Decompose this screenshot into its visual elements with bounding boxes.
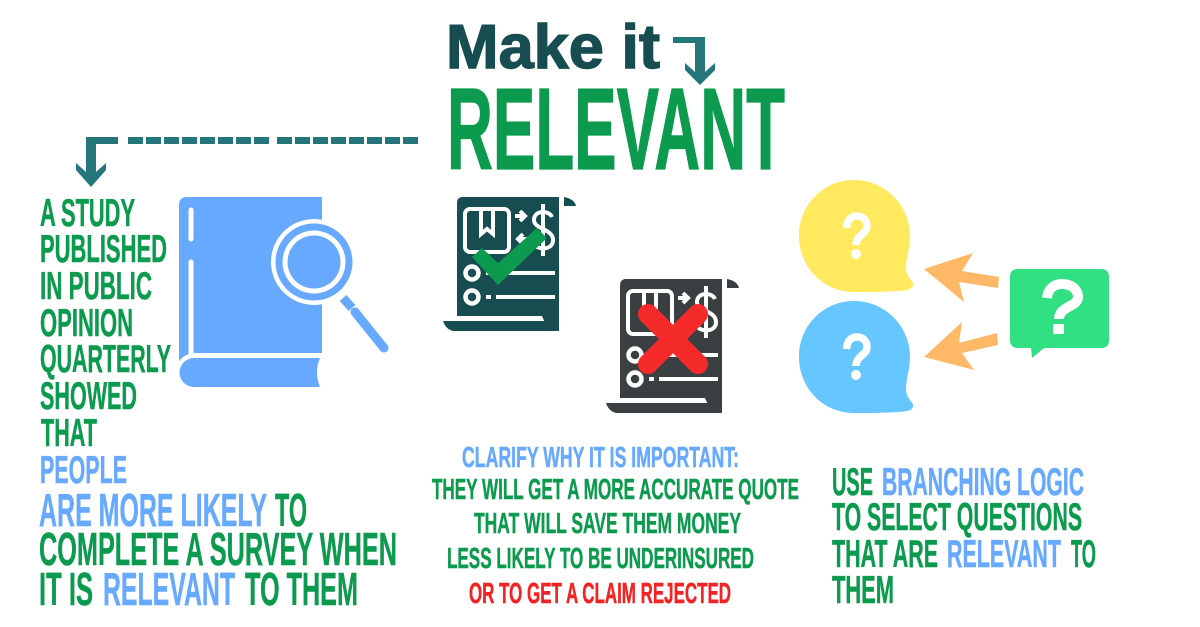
- title: Make it: [446, 13, 660, 82]
- icon: invoice with red cross: [606, 279, 739, 413]
- icon: blue question bubble: [799, 301, 913, 413]
- text block: study finding: RELEVANT: [103, 563, 235, 615]
- title: RELEVANT: [447, 64, 785, 194]
- text block: branching logic: [832, 461, 1096, 612]
- icon: green question bubble: [1010, 269, 1109, 358]
- text block: study intro: PUBLISHED: [40, 228, 167, 271]
- title: [446, 13, 785, 194]
- text block: study intro: SHOWED: [40, 375, 137, 418]
- text block: branching logic: THAT ARE: [832, 533, 938, 576]
- icon: book with magnifying glass: [179, 197, 384, 387]
- text block: study finding: TO THEM: [245, 563, 358, 615]
- text block: study finding: IT IS: [39, 563, 93, 615]
- arrow: green bubble to yellow bubble: [924, 253, 999, 302]
- text block: study finding: ARE MORE LIKELY: [39, 484, 267, 536]
- arrow: green bubble to blue bubble: [924, 322, 998, 370]
- text: TO: [1071, 533, 1096, 576]
- text block: study finding: COMPLETE A SURVEY WHEN: [39, 523, 397, 575]
- text block: study finding: [39, 484, 397, 615]
- text block: clarify why it is important: THAT WILL SAVE THEM MONEY: [474, 508, 741, 540]
- text block: study intro: IN PUBLIC: [40, 265, 152, 308]
- icon: invoice with green check: [443, 197, 576, 331]
- arrow: dashed line to left column: [76, 137, 421, 187]
- text block: study finding: TO: [275, 484, 307, 536]
- text block: branching logic: USE: [832, 461, 873, 504]
- text block: clarify why it is important: OR TO GET A CLAIM REJECTED: [469, 578, 731, 610]
- icon: yellow question bubble: [799, 180, 913, 292]
- text block: study intro: OPINION: [40, 302, 133, 345]
- text block: study intro: PEOPLE: [40, 449, 127, 492]
- text block: study intro: [40, 192, 171, 492]
- arrow: title down to heading: [673, 37, 715, 85]
- text block: branching logic: THEM: [832, 569, 894, 612]
- text block: clarify why it is important: THEY WILL GET A MORE ACCURATE QUOTE: [432, 474, 799, 506]
- text block: clarify why it is important: LESS LIKELY TO BE UNDERINSURED: [447, 543, 754, 575]
- text block: clarify why it is important: [432, 442, 799, 610]
- text block: study intro: THAT: [41, 412, 97, 455]
- text block: clarify why it is important: CLARIFY WHY IT IS IMPORTANT:: [462, 442, 739, 474]
- text block: study intro: A STUDY: [40, 192, 135, 235]
- text block: study intro: QUARTERLY: [40, 338, 171, 381]
- text block: branching logic: RELEVANT: [947, 533, 1061, 576]
